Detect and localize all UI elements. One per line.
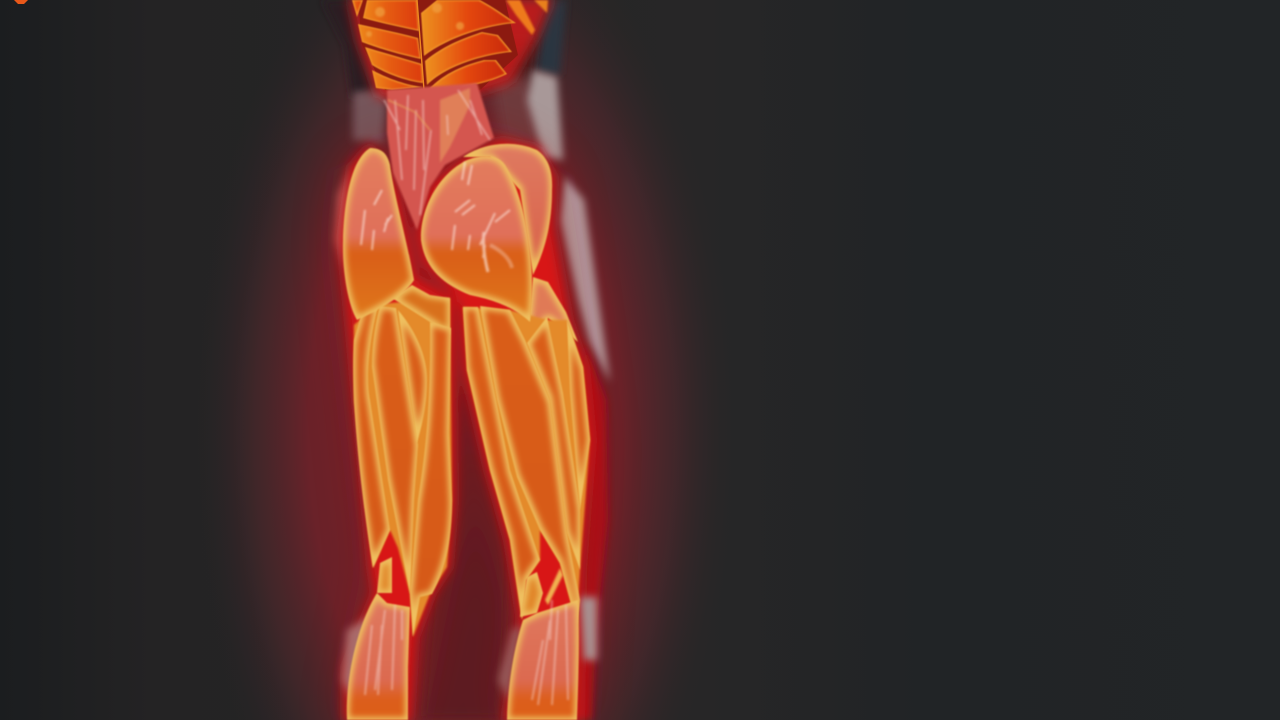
left thigh backing — [354, 298, 452, 637]
lower back fascia — [384, 83, 494, 230]
background red glow — [190, 0, 740, 720]
left ribs — [352, 0, 423, 90]
left thigh muscles — [353, 285, 452, 637]
back right glute — [463, 144, 552, 275]
right glute — [421, 156, 532, 322]
big central muscle — [480, 306, 580, 625]
left calf — [347, 593, 410, 720]
glute sparkles — [452, 162, 512, 272]
wide red muscle halo — [342, 140, 590, 720]
right calf — [507, 600, 579, 720]
medial strip — [463, 307, 540, 620]
calf sparkles — [532, 600, 568, 705]
hip side muscle — [528, 277, 578, 345]
outer strip — [353, 306, 390, 568]
backing behind ribs — [358, 0, 518, 95]
outermost strip — [567, 320, 590, 510]
glute sparkles — [361, 190, 392, 250]
hamstring top detail — [392, 285, 450, 335]
rear leg in deep red — [420, 300, 608, 720]
right thigh backing — [463, 307, 590, 625]
rib sparkles — [366, 3, 464, 37]
left glute — [343, 148, 414, 320]
inner strip — [410, 322, 452, 637]
rib muscles — [352, 0, 548, 97]
spine — [417, 0, 424, 90]
knee tendon — [520, 572, 543, 617]
small orange corner fragment — [14, 0, 28, 4]
calf sparkles — [365, 605, 402, 695]
central muscle — [372, 306, 418, 594]
medial bulge — [398, 310, 427, 443]
right thigh muscles — [463, 306, 590, 625]
bright red muscle glow — [343, 0, 590, 720]
translucent torso shell — [322, 0, 610, 382]
top right rib slivers — [506, 0, 535, 35]
outer muscle — [527, 317, 580, 570]
right ribs — [421, 0, 516, 97]
calf pale halos and knee patch — [342, 597, 597, 700]
knee tendon — [377, 557, 392, 593]
